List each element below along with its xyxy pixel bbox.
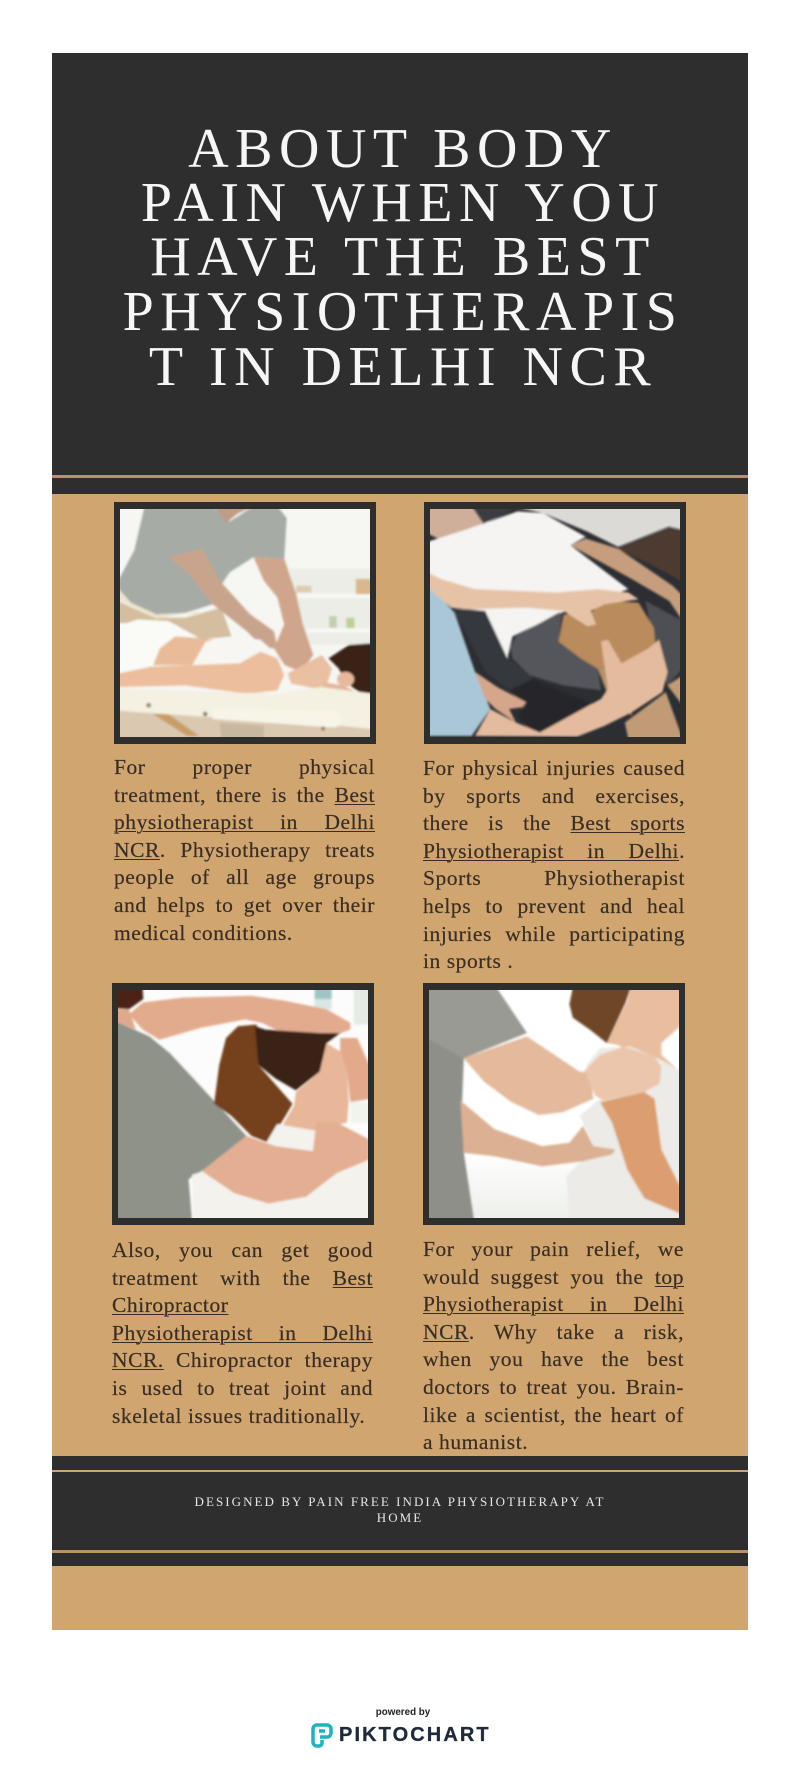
text block: pain relief: doctors to treat you. Brain- — [423, 1375, 684, 1399]
text block: pain relief: like a scientist, the heart of — [423, 1403, 684, 1427]
divider line: footer top rule — [52, 1470, 748, 1472]
text block: pain relief: Physiotherapist in Delhi — [423, 1292, 684, 1316]
text block: proper physical treatment: For proper physical — [114, 755, 375, 779]
text block: proper physical treatment: NCR. Physiotherapy treats — [114, 838, 375, 862]
wordmark: PIKTOCHART — [339, 1724, 491, 1746]
text block: sports injuries: by sports and exercises, — [423, 784, 685, 808]
text block: proper physical treatment: medical conditions. — [114, 921, 293, 945]
title: PAIN WHEN YOU — [141, 172, 665, 234]
text block: proper physical treatment: people of all age groups — [114, 865, 375, 889]
text block: chiropractor: NCR. Chiropractor therapy — [112, 1348, 373, 1372]
text block: pain relief: a humanist. — [423, 1430, 528, 1454]
text block: sports injuries: For physical injuries caused — [423, 756, 685, 780]
text block: sports injuries: helps to prevent and heal — [423, 894, 685, 918]
icon: piktochart mark — [311, 1723, 333, 1748]
text block: sports injuries — [422, 756, 685, 973]
text block: pain relief: would suggest you the top — [423, 1265, 684, 1289]
title: T IN DELHI NCR — [149, 336, 657, 398]
footer credit text — [194, 1494, 605, 1525]
text block: chiropractor — [112, 1238, 373, 1428]
text block: chiropractor: Also, you can get good — [112, 1238, 373, 1262]
text block: sports injuries: in sports . — [423, 949, 513, 973]
text block: pain relief: For your pain relief, we — [423, 1237, 684, 1261]
text block: chiropractor: is used to treat joint and — [112, 1376, 373, 1400]
footer credit text: HOME — [377, 1510, 423, 1525]
panel: tan content background — [52, 494, 748, 1630]
footer credit text: DESIGNED BY PAIN FREE INDIA PHYSIOTHERAPY AT — [195, 1494, 605, 1509]
text block: sports injuries: Sports Physiotherapist — [423, 866, 685, 890]
text block: proper physical treatment — [114, 755, 375, 945]
divider line: footer bottom rule — [52, 1550, 748, 1553]
panel: header — [52, 53, 748, 494]
text block: chiropractor: Physiotherapist in Delhi — [112, 1321, 373, 1345]
image: shoulder therapy — [423, 983, 685, 1225]
text block: sports injuries: Physiotherapist in Delhi. — [423, 839, 685, 863]
text block: proper physical treatment: physiotherapist in Delhi — [114, 810, 375, 834]
text block: proper physical treatment: treatment, there is the Best — [114, 783, 375, 807]
text block: pain relief: when you have the best — [423, 1347, 684, 1371]
image: neck adjustment — [112, 983, 374, 1225]
piktochart logo — [311, 1707, 491, 1748]
text block: pain relief: NCR. Why take a risk, — [423, 1320, 684, 1344]
powered by label: powered by — [376, 1707, 430, 1718]
text block: proper physical treatment: and helps to get over their — [114, 893, 375, 917]
title — [123, 118, 683, 398]
text block: chiropractor: skeletal issues traditionally. — [112, 1404, 365, 1428]
text block: sports injuries: there is the Best sports — [423, 811, 685, 835]
divider line: header gold rule — [52, 475, 748, 478]
text block: sports injuries: injuries while participating — [423, 922, 685, 946]
title: HAVE THE BEST — [150, 226, 656, 288]
image: massage on table — [114, 502, 376, 744]
title: PHYSIOTHERAPIS — [123, 281, 683, 343]
text block: chiropractor: Chiropractor — [112, 1293, 228, 1317]
panel: footer band — [52, 1456, 748, 1566]
text block: chiropractor: treatment with the Best — [112, 1266, 373, 1290]
text block: pain relief — [422, 1237, 684, 1454]
title: ABOUT BODY — [188, 118, 618, 180]
image: knee therapy — [424, 502, 686, 744]
